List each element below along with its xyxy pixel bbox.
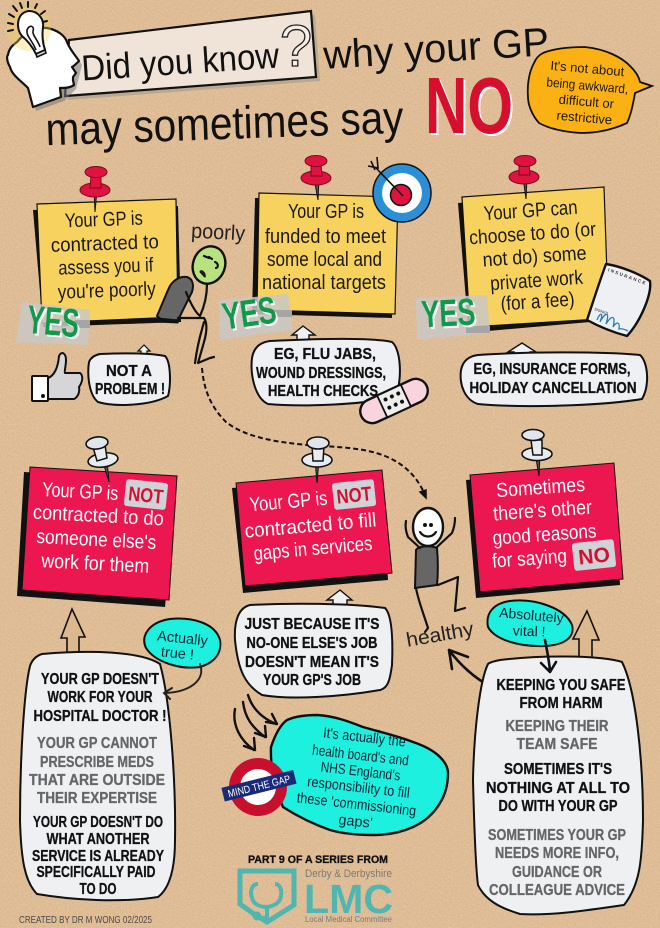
label: yes tape 3: YES: [420, 292, 476, 336]
panel: left bubble hospital doctor: PRESCRIBE MEDS: [40, 754, 154, 771]
callout: not being awkward: difficult or: [558, 92, 615, 111]
callout: insurance forms examples: [461, 343, 647, 406]
panel: other good reasons: Sometimes: [495, 474, 586, 502]
arrow: curved from actually true: [164, 664, 201, 699]
panel: yes funded targets: Your GP is: [288, 201, 364, 223]
icon: insurance form: INSURANCE: [607, 267, 648, 286]
icon: white pin: [302, 437, 332, 483]
panel: middle bubble no-one else's job: YOUR GP'S JOB: [263, 672, 361, 689]
label: yes tape 2: YES: [222, 292, 281, 341]
label: NO chip: NO: [577, 543, 611, 570]
callout: commissioning gaps: NHS England's: [320, 760, 401, 785]
callout: commissioning gaps: health board's and: [311, 743, 410, 769]
panel: middle bubble no-one else's job: [235, 604, 392, 697]
panel: right bubble keeping you safe: KEEPING THEIR: [506, 718, 608, 735]
callout: not being awkward: restrictive: [556, 108, 613, 127]
icon: target with arrow: [368, 157, 431, 222]
panel: yes private work: (for a fee): [500, 288, 575, 316]
title: may sometimes say: may sometimes say: [45, 91, 404, 155]
text: credit: CREATED BY DR M WONG 02/2025: [19, 914, 152, 926]
panel: not contracted gaps in services: [232, 437, 392, 593]
panel: left bubble hospital doctor: YOUR GP DOESN'T DO: [33, 814, 163, 831]
icon: red pin: [509, 156, 539, 199]
icon: red pin: [80, 166, 110, 212]
callout: not a problem: [88, 345, 170, 405]
panel: not contracted someone else's work: [17, 436, 177, 607]
callout: not a problem: NOT A: [106, 363, 152, 380]
logo: derby and derbyshire lmc: Local Medical Committee: [305, 914, 392, 924]
icon: insurance form: SIGNED: [594, 307, 609, 316]
panel: right bubble keeping you safe: KEEPING YOU SAFE: [496, 677, 626, 694]
label: yes tape 1: YES: [27, 300, 83, 348]
callout: insurance forms examples: EG, INSURANCE FORMS,: [474, 361, 630, 378]
panel: yes funded targets: national targets: [262, 272, 386, 294]
callout: flu jabs examples: [252, 326, 400, 405]
label: yes tape 1: YES: [25, 298, 81, 346]
callout: commissioning gaps: [271, 715, 448, 835]
logo: derby and derbyshire lmc: Derby & Derbyshire: [305, 868, 392, 880]
arrow: small up arrow middle: [327, 590, 352, 607]
arrow: to healthy: [449, 650, 488, 685]
panel: left bubble hospital doctor: WORK FOR YOUR: [48, 689, 152, 706]
label: NOT chip: NOT: [127, 483, 164, 509]
panel: left bubble hospital doctor: YOUR GP DOESN'T: [41, 671, 159, 688]
icon: head with light bulb: [7, 2, 82, 111]
panel: right bubble keeping you safe: COLLEAGUE ADVICE: [489, 882, 625, 899]
panel: left bubble hospital doctor: YOUR GP CANNOT: [37, 735, 157, 752]
panel: other good reasons: [466, 430, 623, 598]
arrow: dashed poorly to healthy: [202, 368, 425, 495]
label: healthy: healthy: [405, 618, 475, 652]
panel: yes private work: [458, 156, 608, 331]
panel: right bubble keeping you safe: NOTHING AT ALL TO: [486, 780, 630, 797]
panel: yes assess if poorly: contracted to: [50, 231, 159, 257]
panel: yes assess if poorly: [33, 166, 181, 327]
callout: not being awkward: It's not about: [550, 58, 625, 79]
panel: right bubble keeping you safe: GUIDANCE OR: [512, 864, 602, 881]
icon: mind the gap roundel: [221, 758, 297, 816]
callout: commissioning gaps: these 'commissioning: [296, 790, 417, 820]
label: NO chip: [572, 539, 616, 571]
callout: not being awkward: [528, 47, 652, 133]
callout: insurance forms examples: HOLIDAY CANCELLATION: [470, 380, 636, 397]
icon: question mark: ?: [280, 14, 312, 79]
icon: sticking plaster: [356, 375, 432, 427]
label: yes tape 1: [16, 298, 90, 348]
panel: other good reasons: good reasons: [492, 520, 597, 550]
panel: right bubble keeping you safe: SOMETIMES IT'S: [504, 761, 612, 778]
panel: not contracted gaps in services: gaps in services: [253, 533, 373, 565]
callout: commissioning gaps: It's actually the: [322, 725, 407, 751]
panel: not contracted gaps in services: Your GP is: [249, 488, 328, 516]
panel: right bubble keeping you safe: NEEDS MORE INFO,: [495, 845, 619, 862]
panel: other good reasons: there's other: [492, 497, 593, 525]
label: yes tape 2: YES: [220, 290, 279, 339]
label: NOT chip: NOT: [336, 483, 373, 509]
panel: right bubble keeping you safe: TEAM SAFE: [516, 736, 598, 753]
panel: yes assess if poorly: assess you if: [58, 254, 154, 280]
icon: white pin: [85, 436, 119, 482]
panel: not contracted someone else's work: contracted to do: [32, 502, 164, 530]
panel: yes private work: private work: [489, 267, 585, 295]
panel: middle bubble no-one else's job: DOESN'T MEAN IT'S: [245, 654, 379, 671]
panel: yes funded targets: funded to meet: [265, 226, 386, 248]
label: yes tape 3: YES: [422, 294, 478, 338]
title: NO: NO: [425, 61, 513, 150]
title: why your gp: why your GP: [321, 20, 550, 78]
callout: flu jabs examples: WOUND DRESSINGS,: [256, 365, 386, 382]
arrow: large up arrow left: [61, 609, 85, 668]
icon: mind the gap roundel: MIND THE GAP: [227, 773, 292, 800]
callout: commissioning gaps: responsibility to fill: [306, 774, 411, 802]
icon: poorly stick figure: [157, 242, 231, 363]
callout: not being awkward: being awkward,: [546, 74, 629, 97]
panel: yes assess if poorly: you're poorly: [57, 278, 156, 304]
panel: left bubble hospital doctor: SERVICE IS ALREADY: [32, 848, 165, 865]
title: did you know: Did you know: [80, 34, 281, 89]
panel: not contracted someone else's work: someone else's: [36, 526, 157, 554]
panel: not contracted someone else's work: work for them: [40, 550, 150, 578]
panel: yes private work: not do) some: [482, 242, 587, 272]
icon: thumbs up: [32, 353, 82, 401]
panel: left bubble hospital doctor: THAT ARE OUTSIDE: [29, 772, 165, 789]
arrow: three curved arrows: [234, 695, 277, 750]
panel: right bubble keeping you safe: FROM HARM: [520, 695, 602, 712]
panel: left bubble hospital doctor: HOSPITAL DOCTOR !: [34, 708, 166, 725]
panel: yes funded targets: [252, 156, 398, 318]
panel: yes assess if poorly: Your GP is: [64, 208, 143, 232]
panel: not contracted gaps in services: contracted to fill: [244, 509, 377, 543]
panel: left bubble hospital doctor: TO DO: [80, 881, 116, 898]
panel: left bubble hospital doctor: THEIR EXPERTISE: [37, 790, 157, 807]
text: part 9 of a series: PART 9 OF A SERIES FROM: [248, 854, 388, 866]
arrow head: dashed path: [420, 490, 426, 498]
icon: red pin: [301, 156, 331, 200]
icon: healthy stick figure: [406, 508, 465, 632]
panel: yes funded targets: some local and: [267, 249, 382, 271]
panel: yes private work: choose to do (or: [468, 219, 597, 249]
panel: left bubble hospital doctor: WHAT ANOTHER: [46, 831, 150, 848]
callout: flu jabs examples: HEALTH CHECKS: [268, 383, 378, 400]
title: NO: NO: [427, 63, 515, 152]
arrow: from absolutely vital: [541, 640, 556, 672]
icon: white pin: [522, 430, 552, 476]
panel: other good reasons: for saying: [491, 545, 568, 573]
arrow: large up arrow right: [573, 611, 599, 662]
panel: yes private work: Your GP can: [483, 197, 578, 225]
title banner: [65, 11, 320, 100]
callout: flu jabs examples: EG, FLU JABS,: [274, 346, 376, 363]
callout: commissioning gaps: gaps': [338, 812, 374, 832]
panel: not contracted someone else's work: Your GP is: [42, 479, 119, 505]
logo: derby and derbyshire lmc: LMC: [304, 876, 393, 922]
panel: right bubble keeping you safe: SOMETIMES YOUR GP: [488, 827, 626, 844]
panel: middle bubble no-one else's job: JUST BECAUSE IT'S: [244, 616, 380, 633]
callout: actually true: Actually: [156, 628, 209, 650]
panel: right bubble keeping you safe: DO WITH YOUR GP: [498, 798, 618, 815]
callout: actually true: true !: [160, 644, 195, 664]
callout: actually true: [144, 619, 220, 668]
label: poorly: poorly: [191, 220, 246, 245]
callout: absolutely vital: Absolutely: [499, 604, 564, 626]
callout: absolutely vital: [487, 600, 573, 646]
panel: middle bubble no-one else's job: NO-ONE ELSE'S JOB: [246, 635, 378, 652]
panel: left bubble hospital doctor: [20, 652, 175, 900]
logo: derby and derbyshire lmc: [240, 868, 393, 924]
callout: absolutely vital: vital !: [513, 622, 546, 640]
callout: not a problem: PROBLEM !: [95, 381, 165, 398]
panel: left bubble hospital doctor: SPECIFICALLY PAID: [36, 864, 156, 881]
icon: insurance form: [587, 264, 650, 336]
panel: right bubble keeping you safe: [473, 656, 643, 914]
